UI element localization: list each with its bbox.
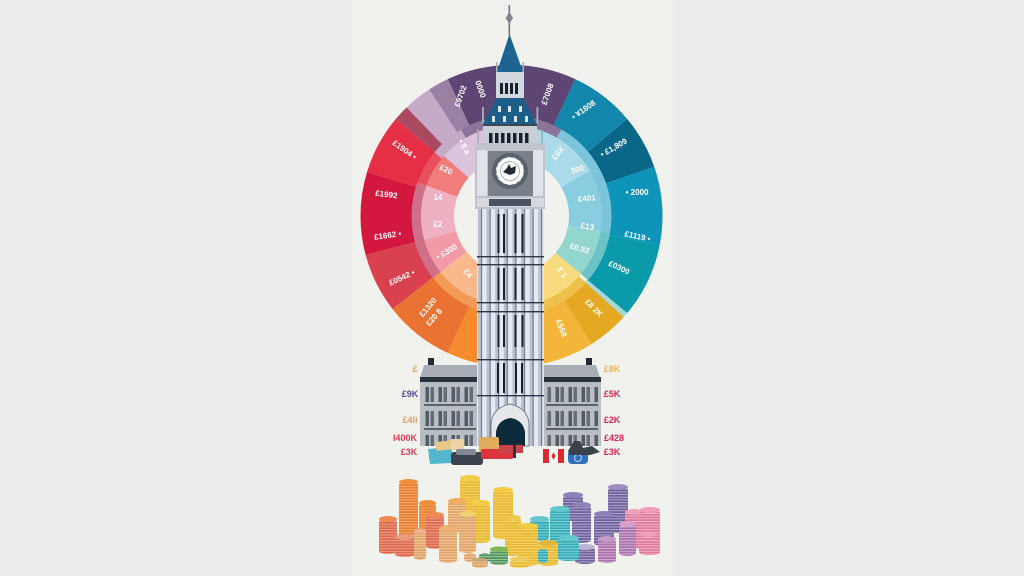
wheel value labels: £1992 xyxy=(375,189,399,201)
side value labels: £ xyxy=(412,364,418,374)
side value labels: £9K xyxy=(402,389,419,399)
wheel value labels: £0542 • xyxy=(388,268,416,288)
icon: gold crate xyxy=(479,437,499,452)
wheel value labels: 14 xyxy=(434,193,443,202)
wheel value labels: • £300 xyxy=(435,242,459,261)
side value labels: £8K xyxy=(604,364,621,374)
lantern gallery xyxy=(483,124,537,146)
left wing xyxy=(420,358,478,446)
main roof with dormers xyxy=(483,98,537,124)
wheel value labels: £1320 xyxy=(417,296,439,319)
outer ring segments xyxy=(386,91,636,341)
spire finial xyxy=(506,5,513,35)
wheel value labels: £9702 xyxy=(453,84,469,108)
icon: blue bag xyxy=(568,450,588,464)
wheel value labels: £7008 xyxy=(540,82,556,106)
wheel value labels: • ¥1808 xyxy=(570,98,598,121)
wheel value labels xyxy=(374,79,652,339)
teal stacks xyxy=(530,506,579,561)
wheel value labels: £558 xyxy=(554,318,569,339)
icon: dark vehicle xyxy=(568,441,600,455)
side value labels: I400K xyxy=(393,433,418,443)
side value labels: £2K xyxy=(604,415,621,425)
wheel value labels: • £1,809 xyxy=(599,136,629,159)
Big Ben tower xyxy=(475,5,545,446)
wheel value labels: £401 xyxy=(578,193,597,204)
wheel value labels: £8 2K xyxy=(583,297,605,319)
icon: boxes and parcel xyxy=(428,439,464,464)
wheel value labels: £0.82 xyxy=(569,242,591,256)
wheel value labels: • 8 a xyxy=(456,138,472,156)
green and tan front coins xyxy=(464,546,508,568)
wheel value labels: £13 xyxy=(580,221,595,232)
clock section xyxy=(475,143,545,209)
purple and pink stacks xyxy=(563,484,660,564)
side value labels xyxy=(393,364,624,457)
teal coin accent xyxy=(538,549,548,563)
building: parliament wings xyxy=(420,358,601,446)
lower tower shaft xyxy=(477,205,544,446)
icon: Canadian flag xyxy=(543,449,564,463)
pinnacles xyxy=(477,62,543,144)
coin stacks xyxy=(379,475,660,568)
orange and salmon stacks xyxy=(379,479,457,563)
entrance arch xyxy=(491,404,529,446)
icon: red vehicle xyxy=(481,445,523,459)
wheel value labels: 300 xyxy=(570,163,585,176)
inner ring segments xyxy=(438,142,586,290)
clock hands xyxy=(503,164,516,175)
spire roof xyxy=(497,34,523,72)
middle band segments xyxy=(416,121,606,311)
side value labels: £4li xyxy=(402,415,418,425)
side value labels: £5K xyxy=(604,389,621,399)
wheel value labels: £0X xyxy=(550,145,567,162)
wheel value labels: £0300 xyxy=(607,259,632,277)
belfry box xyxy=(496,72,524,98)
wheel value labels: £1119 • xyxy=(624,229,652,244)
icons: goods at the foot of the building xyxy=(428,437,600,465)
wheel value labels: 0000 xyxy=(473,79,488,100)
gold stacks xyxy=(448,475,558,568)
wheel value labels: £1662 • xyxy=(374,229,402,242)
right wing xyxy=(544,358,601,446)
wheel value labels: £20 xyxy=(438,163,455,177)
side value labels: £428 xyxy=(604,433,624,443)
wheel value labels: £4 xyxy=(462,267,475,280)
wheel value labels: £ 1 xyxy=(555,265,569,280)
wheel value labels: £2 xyxy=(434,220,443,229)
wheel value labels: • 2000 xyxy=(626,188,649,197)
wheel value labels: £20 8 xyxy=(424,306,444,328)
wheel value labels: £1904 • xyxy=(391,138,418,162)
side value labels: £3K xyxy=(604,447,621,457)
background panel xyxy=(352,0,673,576)
side value labels: £3K xyxy=(401,447,418,457)
donut chart: spending wheel xyxy=(374,79,652,341)
icon: grey car xyxy=(451,449,483,465)
